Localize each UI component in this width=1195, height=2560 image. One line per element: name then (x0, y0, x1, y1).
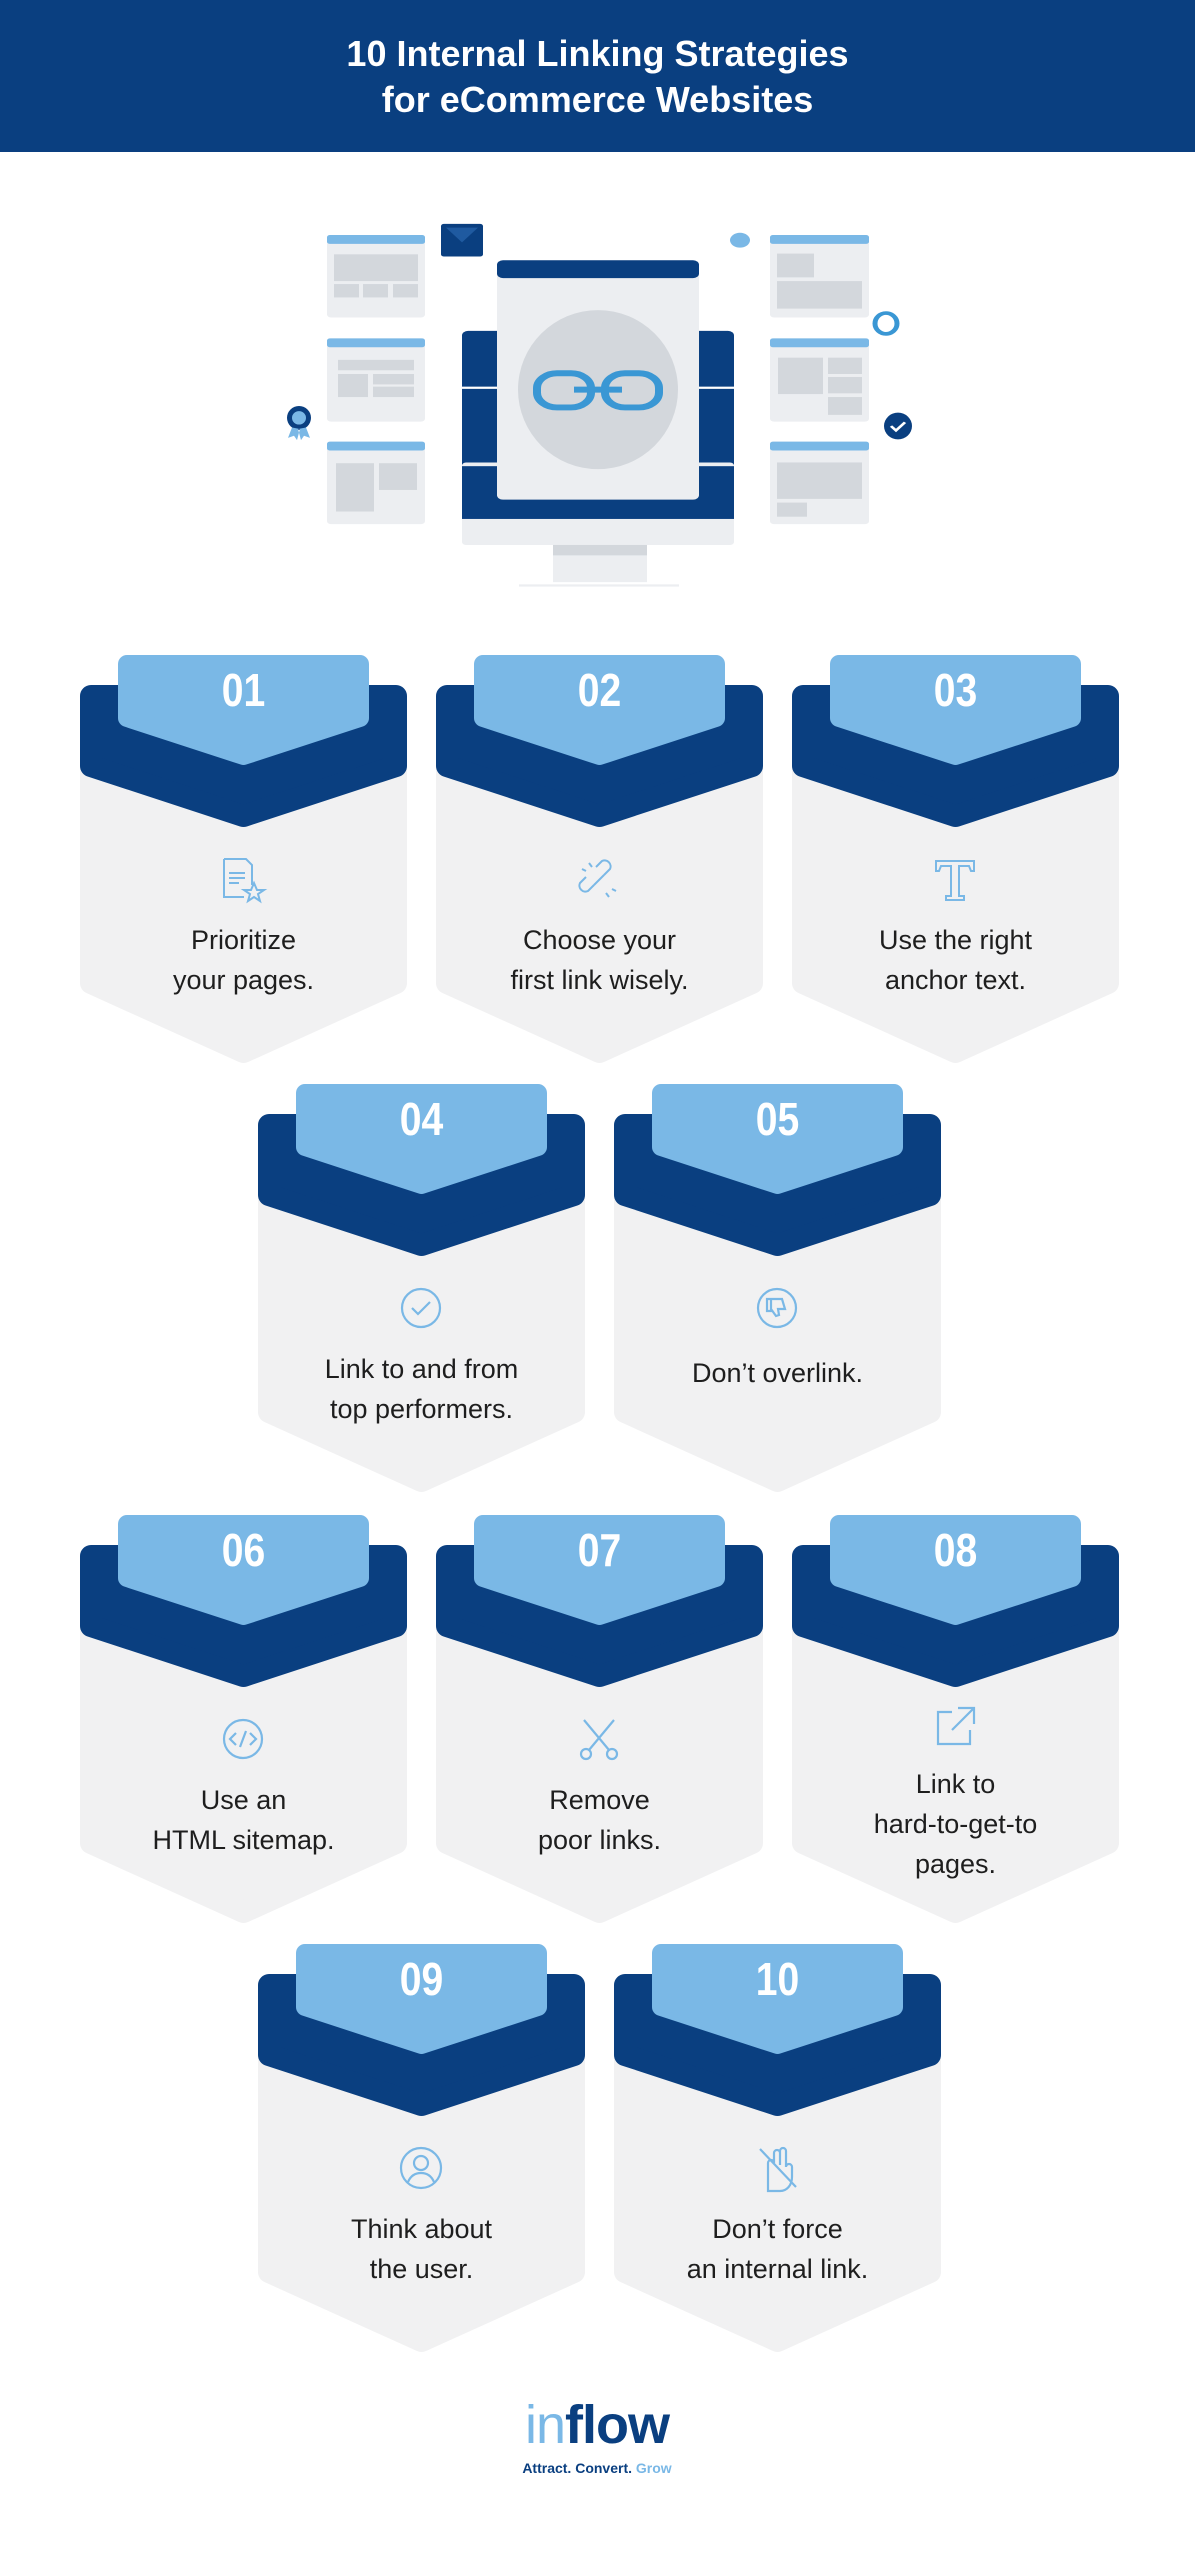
card 05 (614, 1084, 941, 1492)
icon: T (935, 860, 975, 901)
title banner: 10 Internal Linking Strategies (346, 33, 849, 74)
card 02: 02 (578, 664, 621, 716)
card 01: your pages. (173, 965, 314, 995)
card 07: Remove (549, 1785, 650, 1815)
card 03: 03 (934, 664, 977, 716)
title banner (0, 0, 1195, 152)
title banner: for eCommerce Websites (382, 79, 813, 120)
card 04: Link to and from (325, 1354, 518, 1384)
card 08: hard-to-get-to (874, 1809, 1037, 1839)
card 08 (792, 1515, 1119, 1923)
card 05: Don’t overlink. (692, 1358, 863, 1388)
card 09: the user. (370, 2254, 473, 2284)
card 10 (614, 1944, 941, 2352)
card 05: 05 (756, 1093, 799, 1145)
card 07: 07 (578, 1524, 621, 1576)
logo: inflow: Attract. Convert. Grow (522, 2460, 672, 2476)
card 09: 09 (400, 1953, 443, 2005)
card 09 (258, 1944, 585, 2352)
card 08: pages. (915, 1849, 996, 1879)
icon: code (222, 1718, 264, 1760)
icon: check circle (400, 1288, 442, 1328)
card 01 (80, 655, 407, 1063)
icon: external link (936, 1706, 976, 1746)
card 06: Use an (201, 1785, 286, 1815)
icon: user (400, 2146, 442, 2190)
icon: thumbs down (756, 1288, 798, 1328)
card 02: Choose your (523, 925, 676, 955)
card 10: 10 (756, 1953, 799, 2005)
card 02: first link wisely. (510, 965, 689, 995)
card 08: Link to (916, 1769, 995, 1799)
card 04: top performers. (330, 1394, 513, 1424)
card 02 (436, 655, 763, 1063)
card 04: 04 (400, 1093, 443, 1145)
card 10: an internal link. (687, 2254, 868, 2284)
icon: broken link (578, 859, 616, 898)
icon: document star (223, 858, 268, 904)
card 06 (80, 1515, 407, 1923)
card 01: Prioritize (191, 925, 296, 955)
card 10: Don’t force (712, 2214, 843, 2244)
card 06: 06 (222, 1524, 265, 1576)
logo: inflow: inflow (525, 2395, 669, 2455)
icon: scissors (580, 1719, 618, 1760)
card 09: Think about (351, 2214, 492, 2244)
icon: hand crossed (759, 2146, 797, 2192)
hero illustration: monitor with link and pages (287, 224, 912, 586)
card 03 (792, 655, 1119, 1063)
card 06: HTML sitemap. (152, 1825, 335, 1855)
card 07 (436, 1515, 763, 1923)
card 08: 08 (934, 1524, 977, 1576)
card 03: Use the right (879, 925, 1032, 955)
card 07: poor links. (538, 1825, 661, 1855)
card 04 (258, 1084, 585, 1492)
card 01: 01 (222, 664, 265, 716)
card 03: anchor text. (885, 965, 1026, 995)
